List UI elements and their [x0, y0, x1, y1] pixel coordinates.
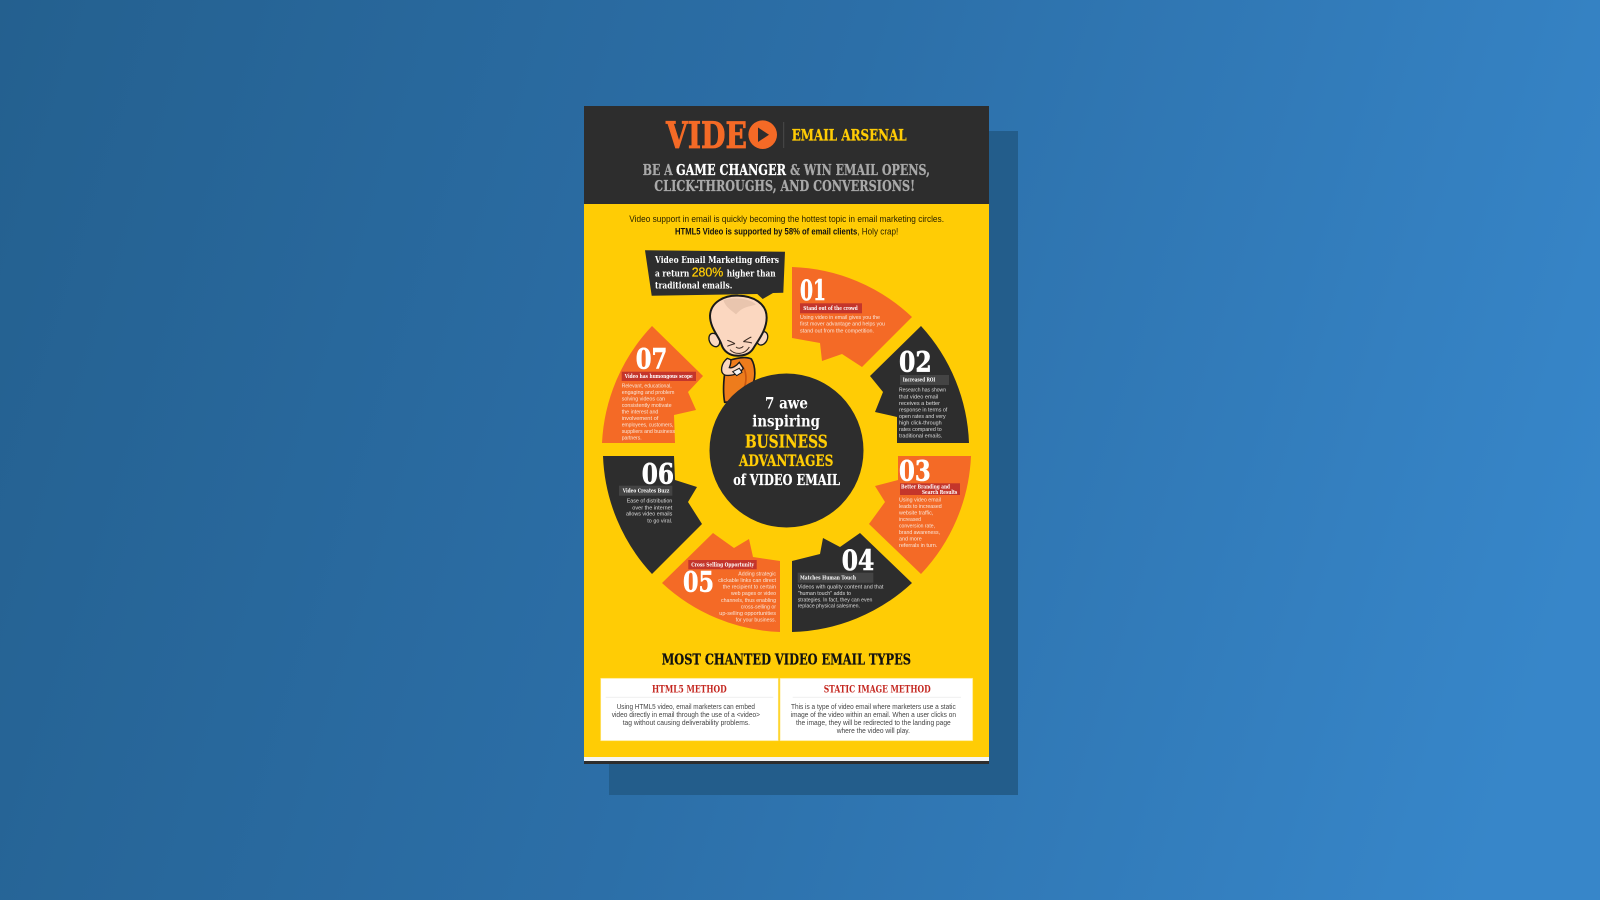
head — [710, 296, 767, 356]
headline: GAME CHANGER — [676, 161, 786, 179]
segment 04: 04 — [842, 544, 874, 577]
segment 03: referrals in turn. — [899, 543, 938, 549]
segment 07: the interest and — [622, 410, 658, 416]
face — [727, 337, 752, 353]
segment 07: 07 — [636, 342, 667, 375]
segment 04 — [792, 533, 912, 632]
segment 03: 03 — [899, 455, 931, 488]
arms — [722, 358, 743, 375]
ears — [707, 332, 722, 348]
center circle: inspiring — [752, 412, 820, 431]
panel: static image method: STATIC IMAGE METHOD — [824, 684, 931, 696]
segment 07: partners. — [622, 435, 642, 441]
headline: BE A — [643, 161, 673, 179]
segment 04: "human touch" adds to — [798, 591, 852, 597]
robe — [724, 358, 755, 402]
segment 01: stand out from the competition. — [800, 328, 874, 334]
panel: static image method: the image, they will be redirected to the landing page — [796, 718, 951, 727]
monk character — [707, 296, 770, 402]
segment 01: first mover advantage and helps you — [800, 322, 885, 328]
segment 01: Stand out of the crowd — [803, 306, 858, 312]
head shading — [723, 298, 756, 314]
panel: HTML5 method: Using HTML5 video, email marketers can embed — [617, 702, 755, 711]
segment 07: suppliers and business — [622, 429, 675, 435]
headline — [643, 161, 930, 195]
logo: VIDE — [665, 115, 747, 157]
segment 06: allows video emails — [626, 512, 672, 518]
panel: static image method: This is a type of video email where marketers use a static — [791, 702, 956, 711]
segment 02: that video email — [899, 394, 938, 400]
segment 06: 06 — [642, 457, 674, 490]
segment 03: website traffic, — [898, 510, 934, 516]
segment 02: high click-through — [899, 421, 942, 427]
segment 02: 02 — [899, 346, 932, 379]
segment 07: Relevant, educational, — [622, 384, 672, 390]
segment 02: Research has shown — [899, 388, 946, 394]
segment 01: Using video in email gives you the — [800, 315, 881, 321]
segment 07: consistently motivate — [622, 403, 672, 409]
intro text — [629, 214, 944, 237]
segment 03: increased — [899, 517, 921, 523]
segment 03: leads to increased — [899, 504, 942, 510]
segment 02: response in terms of — [899, 407, 948, 413]
segment 07: engaging and problem — [622, 390, 674, 396]
segment 02 — [870, 326, 969, 443]
segment 04: replace physical salesmen. — [798, 604, 860, 610]
speech bubble: Video Email Marketing offers — [654, 255, 779, 266]
segment 07: Video has humongous scope — [624, 374, 693, 380]
intro text: , Holy crap! — [857, 227, 898, 237]
panel: static image method: image of the video within an email. When a user clicks on — [791, 710, 956, 719]
speech bubble — [645, 250, 785, 299]
headline: CLICK-THROUGHS, AND CONVERSIONS! — [654, 177, 915, 195]
segment 03 — [869, 455, 971, 574]
segment 02: receives a better — [899, 401, 940, 407]
segment 04: strategies. In fact, they can even — [798, 597, 872, 603]
segment 06: Ease of distribution — [627, 499, 672, 505]
panel: static image method: where the video will play. — [836, 726, 910, 735]
intro text: HTML5 Video is supported by 58% of email clients — [675, 227, 857, 237]
segment 02: rates compared to — [899, 427, 942, 433]
segment 05: channels, thus enabling — [721, 598, 776, 604]
center circle: ADVANTAGES — [738, 451, 833, 470]
segment 03: Better Branding and — [901, 485, 950, 491]
segment 01 — [792, 267, 912, 367]
segment 07: involvement of — [622, 416, 659, 422]
card shadow — [609, 131, 1018, 795]
segment 04: Videos with quality content and that — [798, 585, 884, 591]
segment 05: for your business. — [736, 617, 776, 623]
segment 03: Search Results — [922, 490, 957, 496]
segment 01: 01 — [800, 274, 826, 307]
speech bubble: 280% — [692, 266, 723, 280]
segment 02: Increased ROI — [903, 378, 936, 384]
yellow body — [584, 204, 989, 757]
panel: static image method — [780, 678, 973, 741]
segment 06: Video Creates Buzz — [622, 489, 669, 495]
panel: HTML5 method — [601, 678, 778, 741]
infographic card — [584, 106, 989, 764]
segment 05: clickable links can direct — [718, 578, 776, 584]
center circle: of VIDEO EMAIL — [733, 472, 840, 489]
segment 05: web pages or video — [730, 591, 777, 597]
segment 06: over the internet — [632, 505, 673, 511]
types heading: MOST CHANTED VIDEO EMAIL TYPES — [662, 652, 911, 669]
center circle — [710, 374, 864, 528]
logo: EMAIL ARSENAL — [792, 126, 907, 145]
logo — [665, 115, 907, 157]
speech bubble: traditional emails. — [655, 280, 732, 291]
segment 02: open rates and very — [899, 414, 946, 420]
segment 05: Adding strategic — [738, 572, 776, 578]
segment 03: Using video email — [899, 497, 941, 503]
panel: HTML5 method: video directly in email through the use of a <video> — [612, 710, 760, 719]
segment 07: employees, customers, — [622, 422, 674, 428]
speech bubble: higher than — [727, 269, 776, 280]
segment 07 — [602, 326, 703, 443]
headline: & WIN EMAIL OPENS, — [790, 161, 930, 179]
segment 05: 05 — [683, 566, 714, 599]
footer stripes — [584, 757, 989, 764]
header — [584, 106, 989, 204]
segment 04: Matches Human Touch — [800, 575, 856, 581]
segment 06: to go viral. — [647, 518, 673, 524]
speech bubble: a return — [655, 269, 689, 280]
segment 07: solving videos can — [622, 397, 665, 403]
segment 02: traditional emails. — [899, 434, 943, 440]
segment 05: the recipient to certain — [723, 585, 776, 591]
center circle: BUSINESS — [745, 432, 828, 453]
panel: HTML5 method: tag without causing deliverability problems. — [623, 718, 750, 727]
segment 03: brand awareness, — [899, 530, 940, 536]
panel: HTML5 method: HTML5 METHOD — [652, 684, 727, 696]
segment 05: cross-selling or — [741, 604, 776, 610]
segment 05: Cross Selling Opportunity — [691, 562, 755, 568]
segment 05 — [662, 533, 780, 632]
segment 06 — [603, 456, 702, 574]
intro text: Video support in email is quickly becoming the hottest topic in email marketing circles. — [629, 214, 944, 224]
segment 03: and more — [899, 536, 922, 542]
segment 05: up-selling opportunities — [719, 611, 776, 617]
center circle: 7 awe — [765, 393, 808, 412]
segment 03: conversion rate, — [899, 523, 935, 529]
